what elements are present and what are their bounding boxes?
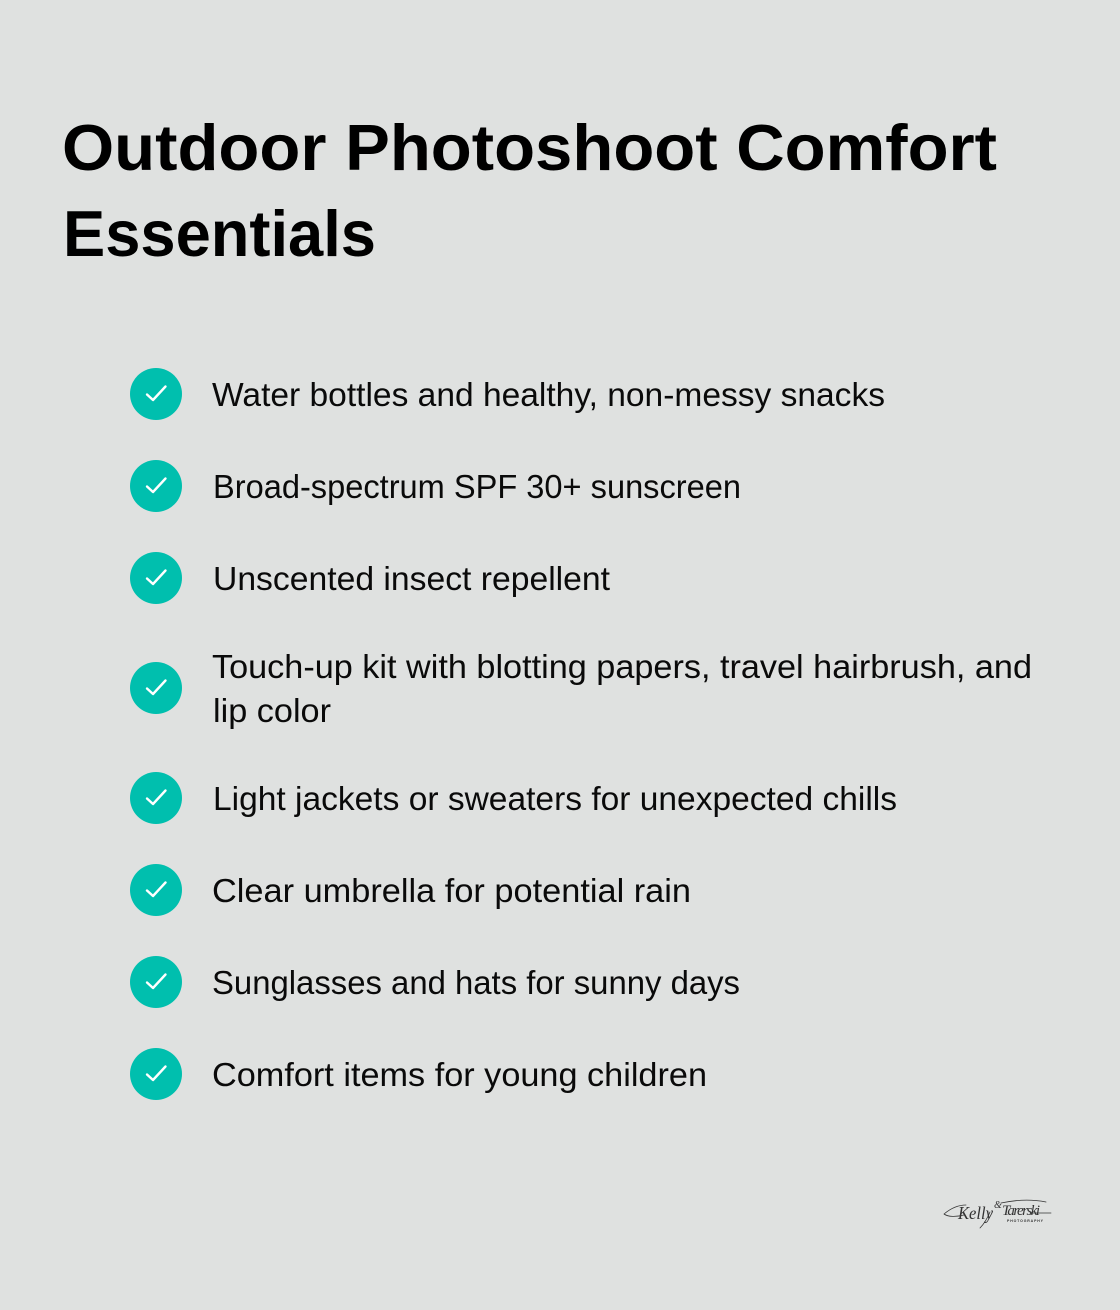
item: water and snacks: Water bottles and healthy, non-messy snacks: [212, 376, 885, 413]
title: Essentials: [63, 197, 376, 270]
logo: signature: [944, 1200, 1051, 1228]
title: [62, 111, 997, 270]
title: Outdoor Photoshoot Comfort: [62, 111, 997, 184]
item: water and snacks: [130, 368, 885, 420]
checklist: [130, 368, 1032, 1100]
item: sunscreen: Broad-spectrum SPF 30+ sunscreen: [213, 468, 741, 505]
item: insect repellent: [130, 552, 610, 604]
item: umbrella: Clear umbrella for potential rain: [212, 872, 691, 909]
item: touch-up kit: [130, 648, 1032, 729]
item: comfort items: [130, 1048, 707, 1100]
item: sunglasses and hats: Sunglasses and hats for sunny days: [212, 964, 740, 1001]
item: touch-up kit: Touch-up kit with blotting papers, travel hairbrush, and: [212, 648, 1032, 685]
logo: signature: Tarerski: [1002, 1203, 1040, 1219]
item: jackets: [130, 772, 897, 824]
item: insect repellent: Unscented insect repellent: [213, 560, 610, 597]
item: sunglasses and hats: [130, 956, 740, 1008]
item: touch-up kit: lip color: [213, 692, 331, 729]
logo: signature: PHOTOGRAPHY: [1007, 1219, 1044, 1223]
item: umbrella: [130, 864, 691, 916]
item: comfort items: Comfort items for young children: [212, 1056, 707, 1093]
logo: signature: &: [994, 1200, 1002, 1211]
item: sunscreen: [130, 460, 741, 512]
item: jackets: Light jackets or sweaters for unexpected chills: [213, 780, 897, 817]
logo: signature: Kelly: [957, 1203, 993, 1223]
